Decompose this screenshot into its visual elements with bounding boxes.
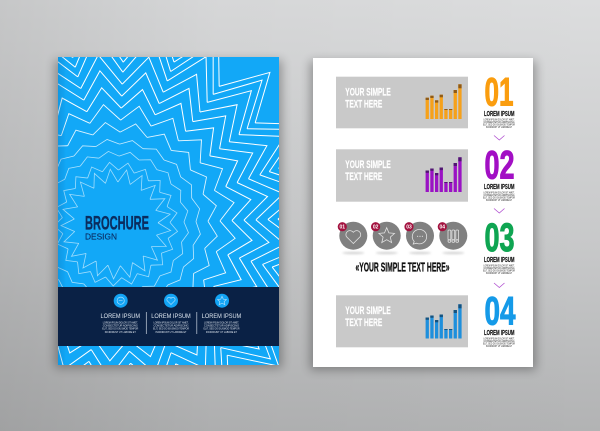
arrow: chevron 1 — [494, 136, 504, 140]
column 1 text: CONSECTETUR ADIPISCING — [103, 325, 138, 328]
column 3 text: ELIT, SED DO EIUSMOD TEMPOR — [204, 328, 240, 331]
row 4: text box with blue chart: YOUR SIMPLE — [345, 305, 391, 317]
row 3: four circle icons — [338, 222, 467, 254]
column 2 text: INCIDIDUNT UT LABORE ET — [156, 331, 187, 334]
sunburst line pattern — [58, 57, 279, 365]
icon: chat — [114, 294, 128, 308]
row 4: text box with blue chart: TEXT HERE — [345, 317, 382, 329]
step 02: 02 — [484, 144, 514, 188]
step 03: LOREM IPSUM — [484, 257, 515, 264]
step 04: 04 — [484, 290, 516, 334]
panel: infographic page — [313, 58, 533, 367]
step 02: LOREM IPSUM — [484, 184, 515, 191]
step 01: LOREM IPSUM DOLOR SIT AMET, — [484, 118, 515, 122]
step 02: INCIDIDUNT UT LABORE ET — [486, 199, 513, 202]
row 1: text box with orange chart — [336, 77, 468, 128]
row 1: text box with orange chart: TEXT HERE — [345, 98, 382, 110]
step 03: CONSECTETUR ADIPISCING — [484, 267, 515, 270]
heading: brochure: BROCHURE — [85, 214, 149, 234]
bar chart: blue — [426, 304, 462, 338]
dark info band — [58, 287, 279, 346]
arrow: chevron 3 — [494, 283, 504, 288]
icon: star — [215, 294, 229, 308]
step 01: INCIDIDUNT UT LABORE ET — [486, 126, 513, 129]
circle icon: star: 02 — [373, 225, 379, 231]
step 04 — [483, 290, 516, 348]
step 02: CONSECTETUR ADIPISCING — [484, 194, 515, 197]
step 04: LOREM IPSUM DOLOR SIT AMET, — [484, 338, 515, 340]
step 04: INCIDIDUNT UT LABORE ET — [486, 345, 513, 348]
step 01: CONSECTETUR ADIPISCING — [484, 121, 515, 124]
column 2 text — [151, 314, 191, 334]
step 03: 03 — [484, 216, 514, 260]
step 01: 01 — [484, 70, 514, 114]
column 2 text: CONSECTETUR ADIPISCING — [154, 325, 189, 328]
column 3 text: INCIDIDUNT UT LABORE ET — [206, 331, 238, 334]
column 1 text: ELIT, SED DO EIUSMOD TEMPOR — [102, 328, 139, 331]
column 3 text: LOREM IPSUM DOLOR SIT AMET, — [204, 322, 239, 324]
step 01 — [483, 70, 515, 129]
slogan text: «YOUR SIMPLE TEXT HERE» — [356, 260, 450, 274]
row 4: text box with blue chart — [336, 295, 468, 347]
step 03: ELIT, SED DO EIUSMOD TEMPOR — [483, 270, 515, 272]
row 2: text box with purple chart: TEXT HERE — [345, 171, 382, 183]
column 1 text — [101, 314, 140, 334]
step 02 — [483, 144, 515, 202]
row 2: text box with purple chart: YOUR SIMPLE — [345, 159, 391, 171]
column 1 text: INCIDIDUNT UT LABORE ET — [105, 331, 136, 334]
step 04: LOREM IPSUM — [484, 330, 515, 337]
shadows behind brochure and page — [55, 60, 536, 370]
column 1 text: LOREM IPSUM — [101, 314, 140, 320]
step 02: ELIT, SED DO EIUSMOD TEMPOR — [483, 198, 515, 200]
step 03: INCIDIDUNT UT LABORE ET — [486, 272, 513, 275]
step 03 — [483, 216, 515, 275]
step 04: CONSECTETUR ADIPISCING — [484, 340, 515, 343]
column 2 text: ELIT, SED DO EIUSMOD TEMPOR — [153, 328, 189, 331]
bar chart: purple — [426, 157, 462, 192]
icon: heart — [164, 294, 178, 308]
subheading: design: DESIGN — [85, 232, 117, 241]
row 2: text box with purple chart — [336, 149, 468, 202]
panel: brochure cover — [58, 57, 279, 365]
column 2 text: LOREM IPSUM — [151, 314, 191, 320]
circle icon: chat: 03 — [406, 225, 412, 231]
column 3 text — [202, 314, 241, 334]
arrow: chevron 2 — [494, 208, 504, 213]
circle icon: binders: 04 — [440, 225, 445, 231]
step 01: LOREM IPSUM — [484, 111, 515, 118]
column 3 text: LOREM IPSUM — [202, 314, 241, 320]
step 01: ELIT, SED DO EIUSMOD TEMPOR — [483, 124, 515, 126]
column 2 text: LOREM IPSUM DOLOR SIT AMET, — [154, 322, 189, 324]
row 1: text box with orange chart: YOUR SIMPLE — [345, 86, 391, 98]
step 03: LOREM IPSUM DOLOR SIT AMET, — [484, 264, 515, 268]
column 3 text: CONSECTETUR ADIPISCING — [204, 325, 239, 328]
bar chart: orange — [426, 84, 462, 119]
circle icon: heart: 01 — [340, 225, 345, 231]
step 04: ELIT, SED DO EIUSMOD TEMPOR — [483, 344, 515, 346]
column 1 text: LOREM IPSUM DOLOR SIT AMET, — [103, 322, 138, 324]
step 02: LOREM IPSUM DOLOR SIT AMET, — [484, 192, 515, 194]
